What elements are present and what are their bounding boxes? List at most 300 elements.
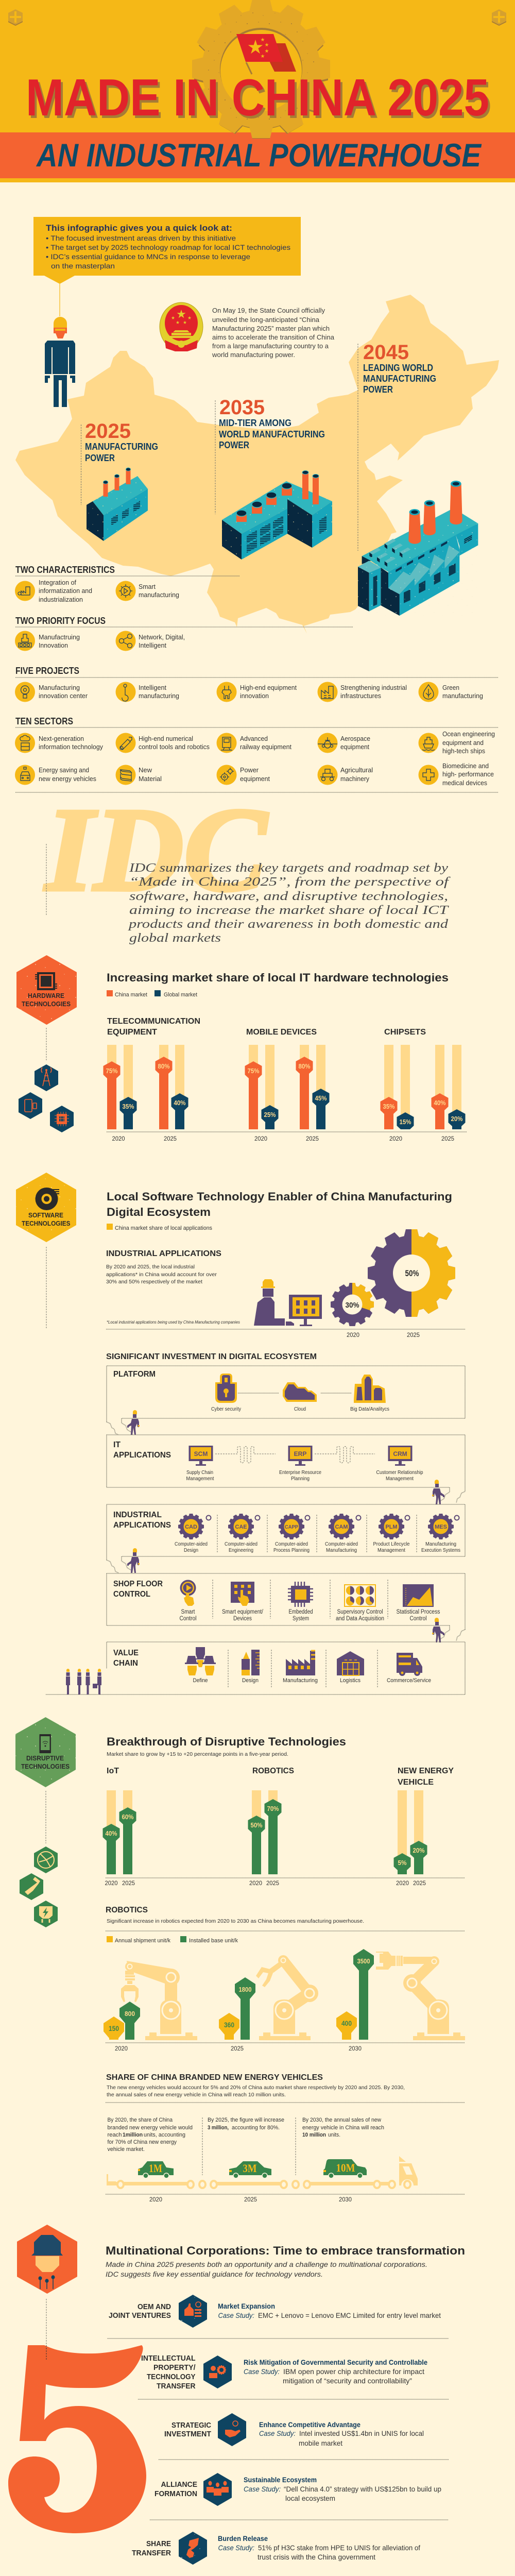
map of China [15, 295, 499, 634]
panel: intro callout [33, 217, 301, 316]
text block: state council [212, 307, 334, 359]
panel: alliance formation: Case Study: [244, 2485, 281, 2493]
text block: state council: world manufacturing power. [212, 351, 295, 359]
chart: chipsets: CHIPSETS [384, 1028, 426, 1037]
icon: ERP monitor: ERP [294, 1450, 306, 1458]
panel: five projects [15, 666, 498, 702]
icon: PLM gear: PLM [385, 1524, 398, 1530]
text block: IDC summary: global markets [129, 931, 221, 945]
panel: shop floor control: Supervisory Control [337, 1609, 383, 1615]
icon: smartphone [39, 1734, 51, 1753]
panel: OEM and joint ventures [109, 2295, 441, 2328]
item: manufacturing innovation [15, 631, 80, 651]
item: agricultural machinery: Agricultural [340, 767, 373, 774]
connector [45, 1791, 46, 1843]
icon: manufacturing [286, 1651, 315, 1675]
chart: mobile devices: 45% [315, 1095, 327, 1102]
item: ocean engineering: high-tech ships [442, 748, 485, 755]
legend: robotics: Installed base unit/k [189, 1938, 238, 1944]
axis: disruptive years: 2025 [122, 1879, 135, 1887]
heading: robotics: ROBOTICS [106, 1906, 148, 1914]
chart: robot arm 2025: 1800 [239, 1986, 252, 1993]
legend: hardware: China market [115, 992, 147, 998]
panel: value chain: Logistics [340, 1677, 360, 1684]
panel: industrial applications: Computer-aided [175, 1541, 208, 1547]
text block: 2025 vehicles [208, 2117, 284, 2131]
connector [46, 1028, 47, 1061]
badge: hardware technologies [16, 955, 77, 1025]
chart: robot arm 2020: 150 [109, 2024, 119, 2032]
chart: robotics share: 50% [250, 1822, 263, 1829]
chart: robot arm 2030 [336, 1949, 465, 2040]
icon: climbing worker [432, 1618, 465, 1642]
icon: charge plug badge [34, 1901, 58, 1927]
panel: two characteristics: TWO CHARACTERISTICS [15, 565, 115, 575]
text block: industrial applications: applications* in China would account for over [106, 1272, 217, 1278]
text block: 2030 vehicles: 10 million [302, 2132, 326, 2138]
axis: software years [106, 1329, 466, 1338]
badge: software technologies: TECHNOLOGIES [22, 1219, 71, 1227]
axis: hardware years: 2025 [441, 1135, 454, 1142]
panel: intro callout: This infographic gives you a quick look at: [46, 223, 232, 233]
icon: cloud [283, 1382, 317, 1402]
text block: state council: unveiled the long-anticipated “China [212, 316, 319, 324]
car 3M: 3M [243, 2162, 257, 2175]
car 10M: 10M [336, 2161, 355, 2174]
panel: ten sectors [15, 716, 498, 792]
axis: disruptive years: 2025 [266, 1879, 279, 1887]
heading: software: Digital Ecosystem [107, 1206, 211, 1218]
icon: supervisory control [345, 1585, 375, 1606]
panel: IT applications: APPLICATIONS [113, 1451, 171, 1460]
chart: gear 50 percent [368, 1229, 455, 1317]
badge: disruptive technologies [15, 1717, 76, 1787]
text block: 2020 vehicles: vehicle market. [107, 2146, 145, 2153]
item: energy vehicles [15, 765, 96, 785]
panel: industrial applications: Computer-aided [275, 1541, 308, 1547]
panel: shop floor control: Smart [181, 1609, 195, 1615]
icon: large factory 2045 [358, 481, 478, 616]
chart: gear 50 percent: 50% [405, 1268, 419, 1278]
chart: new energy vehicle: 20% [413, 1847, 424, 1854]
axis: hardware years: 2020 [254, 1135, 267, 1142]
milestone 2035: POWER [219, 440, 249, 450]
heading: digital ecosystem: SIGNIFICANT INVESTMENT IN DIGITAL ECOSYSTEM [106, 1352, 317, 1361]
icon: screw right [492, 9, 506, 26]
car 3M [229, 2161, 271, 2178]
chart: robotics share: ROBOTICS [252, 1767, 294, 1775]
panel: strategic investment: Case Study: [259, 2429, 296, 2437]
icon: ERP monitor [288, 1446, 312, 1466]
panel: IP technology transfer: Risk Mitigation of Governmental Security and Controllable [244, 2358, 427, 2366]
heading: robotics: Significant increase in robotics expected from 2020 to 2030 as China becomes manufacturing powerhouse. [107, 1918, 364, 1924]
chart: robot arm 2020 [104, 1961, 197, 2040]
panel: industrial applications: Process Planning [273, 1547, 310, 1553]
icon: cyber security [215, 1374, 237, 1403]
icon: hand and coin [218, 2413, 246, 2446]
icon: CAE gear: CAE [235, 1524, 247, 1530]
text block: 2020 vehicles [107, 2117, 193, 2153]
milestone 2045: MANUFACTURING [363, 374, 436, 384]
item: network digital intelligent [115, 631, 185, 651]
panel: ten sectors: TEN SECTORS [15, 716, 73, 726]
icon: gear emblem [192, 0, 330, 139]
item: energy vehicles: new energy vehicles [39, 775, 96, 783]
item: high-end equipment innovation [216, 682, 297, 702]
axis: hardware years: 2025 [164, 1135, 177, 1142]
icon: IoT badge [34, 1846, 58, 1873]
axis: hardware years: 2020 [389, 1135, 402, 1142]
panel: strategic investment: mobile market [299, 2439, 342, 2447]
item: smart manufacturing: manufacturing [139, 591, 179, 599]
text block: state council: aims to accelerate the transition of China [212, 334, 334, 341]
panel: IT applications: IT [113, 1440, 121, 1449]
panel: IP technology transfer: INTELLECTUAL [141, 2354, 196, 2363]
chart: new energy vehicle: VEHICLE [398, 1778, 434, 1787]
text block: 2020 vehicles: units, accounting [144, 2132, 185, 2138]
heading: software: Local Software Technology Enabler of China Manufacturing [107, 1190, 452, 1203]
milestone 2035: MID-TIER AMONG [219, 418, 291, 428]
chart: telecommunication equipment: EQUIPMENT [107, 1028, 157, 1037]
icon: smart control [180, 1580, 196, 1606]
text block: 2020 vehicles: By 2020, the share of China [107, 2117, 173, 2123]
item: integration: industrialization [39, 596, 83, 603]
panel: industrial applications: Manufacturing [425, 1541, 456, 1547]
icon: telecom tower badge [35, 1064, 58, 1091]
panel: intro callout: • The focused investment areas driven by this initiative [46, 234, 236, 242]
icon: disc [35, 1188, 59, 1210]
icon: hand release [179, 2532, 207, 2565]
text block: industrial applications: 30% and 50% respectively of the market [106, 1279, 202, 1285]
text block: 2025 vehicles: 3 million, [208, 2125, 229, 2131]
chart: chipsets: 20% [451, 1115, 462, 1123]
panel: industrial applications: Manufacturing [326, 1547, 357, 1553]
chart: telecommunication equipment: 75% [106, 1067, 117, 1075]
panel: share transfer: SHARE [146, 2540, 171, 2548]
item: railway: Advanced [240, 735, 268, 742]
text block: industrial applications: INDUSTRIAL APPLICATIONS [106, 1249, 221, 1258]
icon: MES gear: MES [435, 1524, 447, 1530]
heading: software [107, 1190, 452, 1218]
item: manufacturing innovation: Manufactruing [39, 634, 80, 641]
panel: IP technology transfer: mitigation of “security and controllability” [283, 2377, 412, 2385]
text block: state council: On May 19, the State Council officially [212, 307, 325, 314]
heading: multinational: IDC suggests five key essential guidance for technology vendors. [106, 2270, 323, 2278]
axis: vehicle years: 2020 [149, 2196, 162, 2203]
icon: group of people [66, 1669, 101, 1694]
panel: intro callout: • The target set by 2025 technology roadmap for local ICT technologies [46, 243, 290, 251]
icon: big numeral 5 [8, 2345, 146, 2533]
panel: strategic investment [164, 2413, 424, 2447]
icon: MES gear [428, 1514, 459, 1539]
panel: IT applications [107, 1435, 465, 1492]
panel: intro callout: on the masterplan [51, 262, 115, 270]
chart: new energy vehicle [393, 1767, 454, 1874]
chart: chipsets: 35% [383, 1103, 394, 1110]
axis: disruptive years: 2020 [105, 1879, 118, 1887]
chart: mobile devices [245, 1028, 330, 1129]
panel: IP technology transfer: TRANSFER [157, 2382, 196, 2391]
icon: group [203, 2473, 232, 2506]
panel: IT applications: Enterprise Resource [279, 1469, 321, 1476]
item: integration: Integration of [39, 579, 77, 586]
chart: IoT [103, 1767, 136, 1874]
legend: hardware: Global market [164, 992, 197, 998]
chart: robot arm 2025: 360 [224, 2021, 234, 2029]
car 1M: 1M [149, 2162, 162, 2175]
text block: IDC summary: products and their awareness in both domestic and [127, 918, 449, 931]
heading: robotics [106, 1906, 465, 1931]
icon: embedded system [288, 1582, 313, 1607]
milestone 2025: POWER [85, 453, 115, 463]
panel: OEM and joint ventures: EMC + Lenovo = Lenovo EMC Limited for entry level market [258, 2311, 441, 2319]
axis: vehicle years: 2030 [339, 2196, 352, 2203]
panel: shop floor control: Control [410, 1616, 426, 1622]
item: power equipment [216, 765, 270, 785]
panel: intro callout: • IDC’s essential guidance to MNCs in response to leverage [46, 252, 250, 261]
axis: robotics years: 2030 [349, 2045, 362, 2052]
icon: factory dollar [179, 2295, 207, 2328]
icon: chip [35, 972, 57, 990]
panel: shop floor control: Embedded [288, 1609, 313, 1615]
heading: disruptive: Breakthrough of Disruptive Technologies [107, 1735, 346, 1748]
connector [46, 1247, 47, 1329]
icon: small factory 2025 [87, 468, 148, 541]
connector over numeral [46, 2345, 47, 2360]
chart: mobile devices: 75% [247, 1067, 260, 1075]
panel: platform: Cyber security [211, 1406, 241, 1412]
chart: gear 30 percent [331, 1283, 374, 1326]
panel: shop floor control: Devices [233, 1616, 252, 1622]
item: agricultural machinery: machinery [340, 775, 370, 783]
panel: value chain: Manufacturing [283, 1677, 318, 1684]
item: energy vehicles: Energy saving and [39, 767, 89, 774]
icon: climbing worker [107, 1548, 143, 1573]
legend: robotics [107, 1936, 238, 1944]
axis: vehicle years [106, 2194, 465, 2203]
badge: disruptive technologies: TECHNOLOGIES [21, 1762, 70, 1770]
legend: robotics: Annual shipment unit/k [115, 1938, 170, 1944]
badge: software technologies [16, 1173, 76, 1242]
panel: IT applications: Supply Chain [186, 1469, 213, 1476]
heading: disruptive: Market share to grow by +15 to +20 percentage points in a five-year period. [107, 1751, 288, 1757]
milestone 2035 [215, 396, 325, 514]
icon: national emblem [160, 302, 203, 351]
item: new material: Material [139, 775, 162, 783]
chart: robot arm 2030: 400 [341, 2019, 352, 2027]
axis: robotics years: 2020 [115, 2045, 128, 2052]
panel: shop floor control: CONTROL [113, 1590, 150, 1599]
text block: 2020 vehicles: branded new energy vehicle would [107, 2125, 193, 2131]
icon: China flag [236, 34, 296, 74]
orange subtitle band [0, 132, 515, 178]
icon: person and gear [203, 2355, 232, 2388]
item: aerospace: Aerospace [340, 735, 370, 742]
panel: platform: Cloud [294, 1406, 306, 1412]
axis: robotics years [106, 2043, 465, 2052]
item: industrial infrastructures [317, 682, 407, 702]
axis: hardware years [107, 1132, 467, 1142]
panel: share transfer: Case Study: [218, 2544, 254, 2552]
chart: chipsets: 40% [434, 1099, 446, 1107]
milestone 2035: WORLD MANUFACTURING [219, 429, 325, 439]
panel: shop floor control: System [293, 1616, 309, 1622]
item: numerical control: control tools and robotics [139, 743, 210, 751]
milestone 2045 [358, 341, 436, 551]
icon: robot arm badge [20, 1873, 43, 1900]
badge: multinational corporations [17, 2225, 77, 2294]
text block: 2030 vehicles: energy vehicle in China will reach [302, 2125, 384, 2131]
icon: logistics [337, 1651, 364, 1675]
panel: alliance formation: ALLIANCE [161, 2481, 197, 2489]
axis: vehicle years: 2025 [244, 2196, 257, 2203]
panel: shop floor control: SHOP FLOOR [113, 1580, 163, 1588]
panel: value chain: Define [193, 1677, 208, 1684]
item: integration [15, 579, 92, 603]
milestone 2045: POWER [363, 384, 393, 395]
chart: new energy vehicle: NEW ENERGY [398, 1767, 454, 1775]
panel: header [0, 0, 515, 182]
panel: strategic investment: INVESTMENT [164, 2430, 211, 2438]
text block: 2020 vehicles: reach [107, 2132, 122, 2138]
panel: two priority focus [15, 616, 353, 651]
panel: IP technology transfer: TECHNOLOGY [147, 2373, 196, 2381]
panel: alliance formation: local ecosystem [285, 2494, 335, 2502]
panel: industrial applications: Design [184, 1547, 198, 1553]
icon: climbing worker [107, 1410, 143, 1435]
badge: hardware technologies: TECHNOLOGIES [22, 1000, 71, 1008]
panel: IT applications: Customer Relationship [376, 1469, 423, 1476]
panel: OEM and joint ventures: Market Expansion [218, 2302, 275, 2310]
heading: new energy vehicles [106, 2073, 465, 2103]
car 1M [138, 2161, 174, 2178]
text block: 2025 vehicles: By 2025, the figure will increase [208, 2117, 284, 2123]
panel: industrial applications: INDUSTRIAL [113, 1511, 162, 1519]
chart: new energy vehicle: 5% [398, 1859, 407, 1867]
item: industrial infrastructures: Strengthening industrial [340, 684, 407, 691]
panel: share transfer [132, 2532, 420, 2565]
panel: strategic investment: Enhance Competitive Advantage [259, 2420, 360, 2429]
item: biomedicine: Biomedicine and [442, 762, 489, 770]
text block: industrial applications: By 2020 and 2025, the local industrial [106, 1264, 195, 1270]
icon: chipset badge [50, 1106, 74, 1132]
item: next generation IT: information technology [39, 743, 104, 751]
item: numerical control [115, 733, 210, 753]
chart: mobile devices: 25% [264, 1111, 276, 1118]
icon: define [185, 1647, 216, 1675]
milestone 2045: LEADING WORLD [363, 363, 433, 373]
panel: value chain: VALUE [113, 1649, 139, 1657]
item: green manufacturing: manufacturing [442, 692, 483, 700]
text block: 2020 vehicles: 1million [123, 2132, 143, 2138]
chart: robotics share [248, 1767, 294, 1874]
icon: CAPP gear: CAPP [285, 1524, 298, 1530]
axis: disruptive years [105, 1878, 465, 1887]
item: biomedicine: medical devices [442, 779, 487, 787]
icon: SCM monitor: SCM [194, 1450, 208, 1458]
chart: mobile devices: MOBILE DEVICES [246, 1028, 317, 1037]
panel: alliance formation: “Dell China 4.0” strategy with US$125bn to build up [284, 2485, 441, 2493]
icon: big data [354, 1375, 386, 1403]
icon: CAM gear: CAM [335, 1524, 348, 1530]
panel: share transfer: 51% pf H3C stake from HPE to UNIS for alleviation of [258, 2544, 420, 2552]
panel: two characteristics [15, 565, 240, 603]
panel: IT applications: Management [186, 1476, 214, 1482]
milestone 2025: MANUFACTURING [85, 442, 158, 452]
panel: industrial applications: Management [377, 1547, 405, 1553]
item: manufacturing innovation: Innovation [39, 642, 68, 649]
icon: SCM monitor [188, 1446, 213, 1466]
item: smart manufacturing: Smart [139, 583, 156, 590]
text block: 2025 vehicles: accounting for 80%. [232, 2125, 280, 2131]
panel: industrial applications [107, 1504, 465, 1560]
text block: 2020 vehicles: for 70% of China new energy [107, 2139, 177, 2145]
icon: CAD gear [178, 1514, 211, 1539]
heading: new energy vehicles: The new energy vehicles would account for 5% and 20% of China auto market share respectively by 2020 and 2025. By 2030, [107, 2084, 405, 2091]
chart: robot arm 2025 [219, 1955, 318, 2040]
panel: share transfer: Burden Release [218, 2534, 268, 2543]
panel: industrial applications: Computer-aided [325, 1541, 358, 1547]
axis: robotics years: 2025 [231, 2045, 244, 2052]
item: ocean engineering: equipment and [442, 739, 484, 747]
item: power equipment: equipment [240, 775, 270, 783]
heading: new energy vehicles: the annual sales of new energy vehicle in China will reach 10 million units. [107, 2092, 286, 2098]
item: intelligent manufacturing [115, 682, 179, 702]
panel: IP technology transfer: IBM open power chip architecture for impact [283, 2367, 424, 2376]
icon: statistical process [403, 1584, 434, 1607]
panel: strategic investment: STRATEGIC [171, 2421, 211, 2430]
item: new material [115, 765, 162, 785]
panel: shop floor control: and Data Acquisition [336, 1616, 384, 1622]
axis: disruptive years: 2025 [413, 1879, 426, 1887]
panel: share transfer: TRANSFER [132, 2549, 171, 2557]
icon: CAE gear [228, 1514, 260, 1539]
milestone 2045: 2045 [363, 341, 409, 364]
item: next generation IT [15, 733, 104, 753]
chart: telecommunication equipment: 80% [158, 1063, 170, 1070]
chart: robotics share: 70% [267, 1805, 279, 1812]
panel: platform: PLATFORM [113, 1370, 156, 1379]
heading: disruptive [107, 1735, 346, 1757]
item: biomedicine: high- performance [442, 771, 494, 778]
item: railway: railway equipment [240, 743, 292, 751]
item: network digital intelligent: Network, Digital, [139, 634, 185, 641]
icon: CRM monitor [388, 1446, 412, 1466]
text block: 2030 vehicles [302, 2117, 384, 2138]
panel: platform: Big Data/Analitycs [350, 1406, 389, 1412]
chart: car carrier [107, 2156, 418, 2188]
panel: OEM and joint ventures: Case Study: [218, 2311, 254, 2319]
icon: design [242, 1650, 260, 1675]
axis: software years: 2025 [407, 1331, 420, 1338]
connector [46, 2299, 47, 2345]
heading: new energy vehicles: SHARE OF CHINA BRANDED NEW ENERGY VEHICLES [106, 2073, 323, 2082]
icon: commerce service [397, 1653, 422, 1676]
icon: medium factory 2035 [222, 471, 332, 560]
axis: software years: 2020 [347, 1331, 359, 1338]
item: new material: New [139, 767, 152, 774]
text block: industrial applications [106, 1249, 240, 1325]
panel: share transfer: trust crisis with the China government [258, 2553, 375, 2561]
panel: alliance formation [154, 2473, 441, 2506]
item: agricultural machinery [317, 765, 373, 785]
item: ocean engineering: Ocean engineering [442, 731, 495, 738]
panel: industrial applications: Engineering [229, 1547, 253, 1553]
panel: industrial applications: Execution Systems [421, 1547, 460, 1553]
axis: hardware years: 2020 [112, 1135, 125, 1142]
axis: disruptive years: 2020 [396, 1879, 409, 1887]
panel: shop floor control: Statistical Process [397, 1609, 440, 1615]
